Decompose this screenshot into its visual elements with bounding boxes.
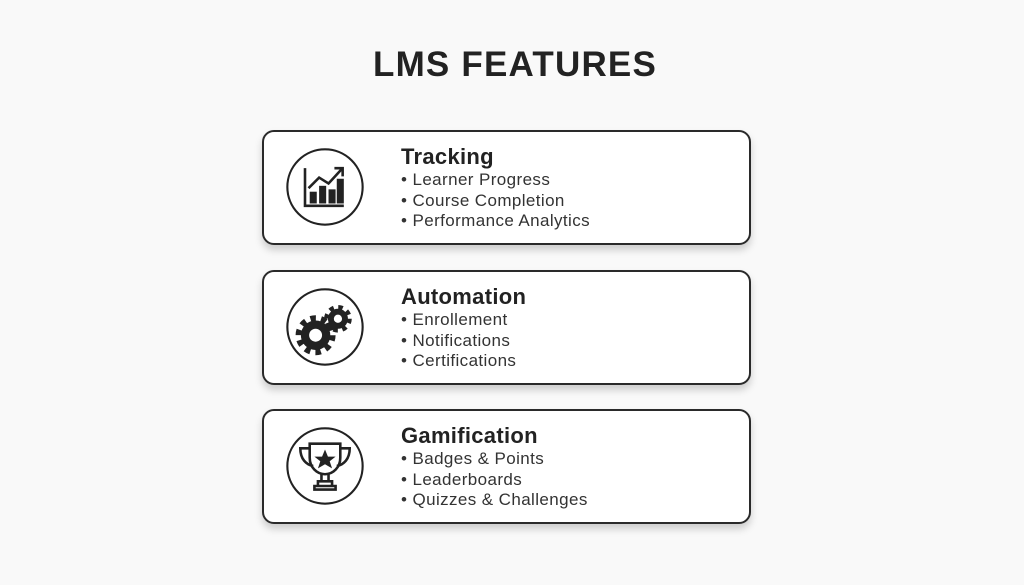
icon: chart — [286, 148, 364, 226]
icon: gears — [286, 288, 364, 366]
text: gamification: • Leaderboards — [401, 470, 522, 489]
panel: gamification — [262, 409, 751, 524]
text: automation: • Enrollement — [401, 310, 508, 329]
text: gamification: Gamification — [401, 423, 538, 448]
text: automation: • Certifications — [401, 351, 516, 370]
title: LMS FEATURES — [373, 45, 657, 84]
panel: tracking — [262, 130, 751, 245]
text: gamification: • Quizzes & Challenges — [401, 490, 588, 509]
text: automation — [401, 284, 526, 370]
text: automation: • Notifications — [401, 331, 510, 350]
text: tracking: • Course Completion — [401, 191, 565, 210]
text: gamification — [401, 423, 588, 509]
panel: automation — [262, 270, 751, 385]
text: tracking: Tracking — [401, 144, 494, 169]
text: tracking — [401, 144, 590, 230]
text: tracking: • Performance Analytics — [401, 211, 590, 230]
icon: trophy — [286, 427, 364, 505]
text: tracking: • Learner Progress — [401, 170, 550, 189]
text: gamification: • Badges & Points — [401, 449, 544, 468]
text: automation: Automation — [401, 284, 526, 309]
